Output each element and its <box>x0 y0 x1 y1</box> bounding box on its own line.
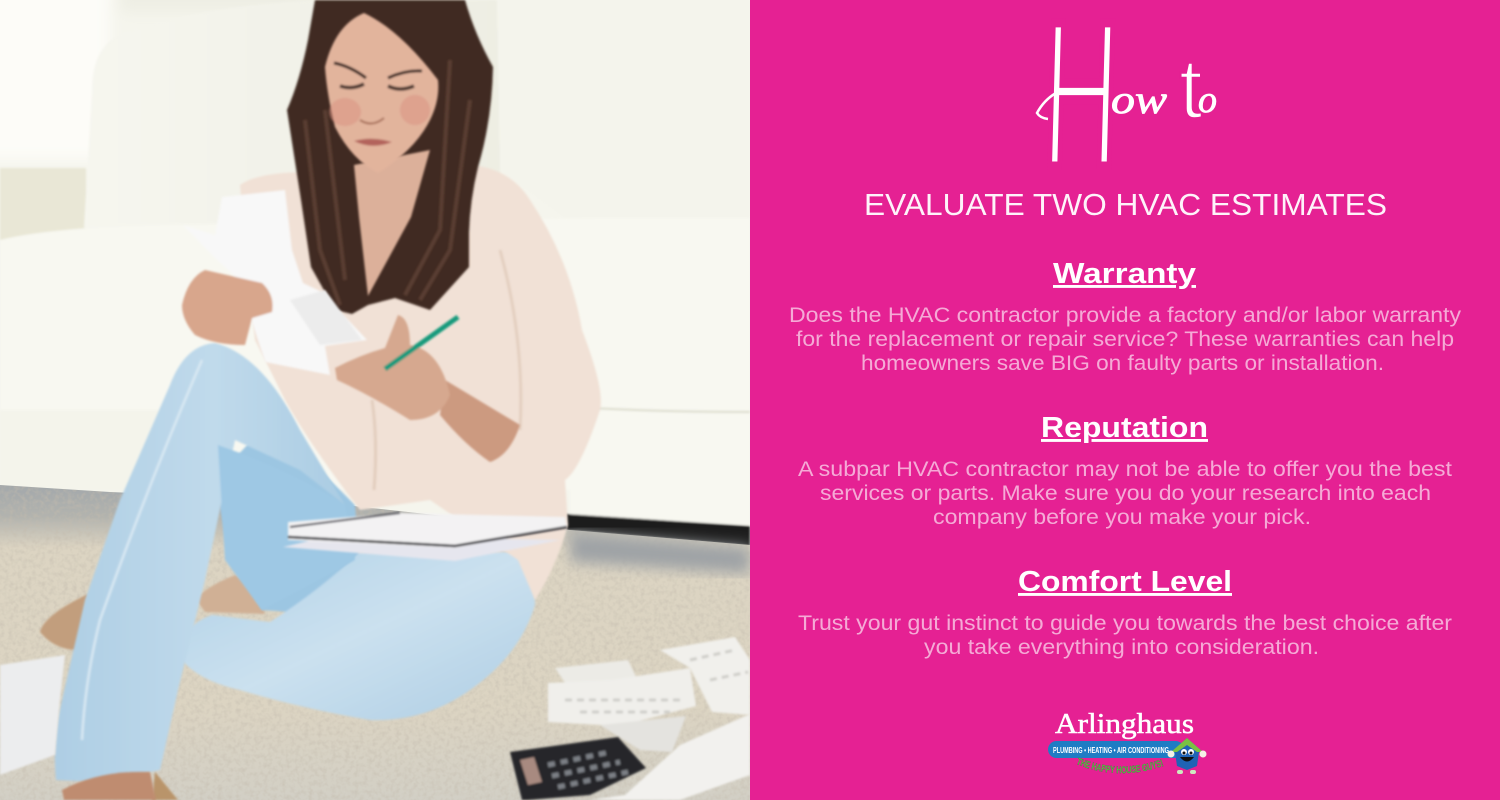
arm and hand with pencil <box>335 315 520 462</box>
section: reputation <box>798 412 1452 529</box>
reputation text: A subpar HVAC contractor may not be able to offer you the best <box>798 457 1452 481</box>
calculator <box>510 737 646 800</box>
comfort level heading: Comfort Level <box>1018 566 1232 598</box>
crumpled receipt and hand <box>182 190 367 375</box>
long receipt <box>590 714 750 800</box>
heading: EVALUATE TWO HVAC ESTIMATES <box>864 187 1387 222</box>
title script: How to: t <box>1179 42 1203 137</box>
blouse <box>240 165 601 600</box>
shoes <box>40 575 265 800</box>
photo: woman reviewing estimates on the floor <box>0 0 750 800</box>
logo services pill <box>1048 741 1184 758</box>
warranty text <box>789 303 1461 375</box>
sofa <box>0 0 750 546</box>
warranty text: for the replacement or repair service? These warranties can help <box>796 327 1454 351</box>
reputation text <box>798 457 1452 529</box>
carpet <box>0 485 750 800</box>
reputation text: services or parts. Make sure you do your research into each <box>820 481 1431 505</box>
comfort level text: Trust your gut instinct to guide you towards the best choice after <box>798 611 1452 635</box>
panel: pink content <box>750 0 1461 776</box>
comfort level text: you take everything into consideration. <box>924 635 1319 659</box>
reputation text: company before you make your pick. <box>933 505 1311 529</box>
title script: How to: ow <box>1111 77 1167 122</box>
neck and chest <box>354 150 430 296</box>
section: warranty <box>789 258 1461 375</box>
logo services pill: PLUMBING • HEATING • AIR CONDITIONING <box>1053 746 1169 755</box>
face <box>325 13 438 173</box>
scattered receipts <box>0 637 750 775</box>
warranty text: homeowners save BIG on faulty parts or installation. <box>861 351 1384 375</box>
reputation heading: Reputation <box>1041 412 1208 444</box>
logo mascot house <box>1168 738 1206 774</box>
jeans: raised leg <box>55 343 355 782</box>
notebook <box>283 513 567 561</box>
logo: Arlinghaus <box>1048 708 1206 774</box>
carpet shadow band <box>570 532 750 574</box>
comfort level text <box>798 611 1452 659</box>
title script: How to <box>1037 0 1217 210</box>
warranty text: Does the HVAC contractor provide a factory and/or labor warranty <box>789 303 1461 327</box>
hair <box>287 0 493 314</box>
logo slogan: THE HAPPY HOUSE GUYS! <box>1077 758 1164 774</box>
foot <box>62 772 156 800</box>
logo wordmark: Arlinghaus <box>1055 708 1194 740</box>
warranty heading: Warranty <box>1053 258 1196 290</box>
window background <box>0 0 320 160</box>
section: comfort level <box>798 566 1452 659</box>
title script: How to: o <box>1198 79 1217 121</box>
jeans: lap leg <box>178 420 535 720</box>
